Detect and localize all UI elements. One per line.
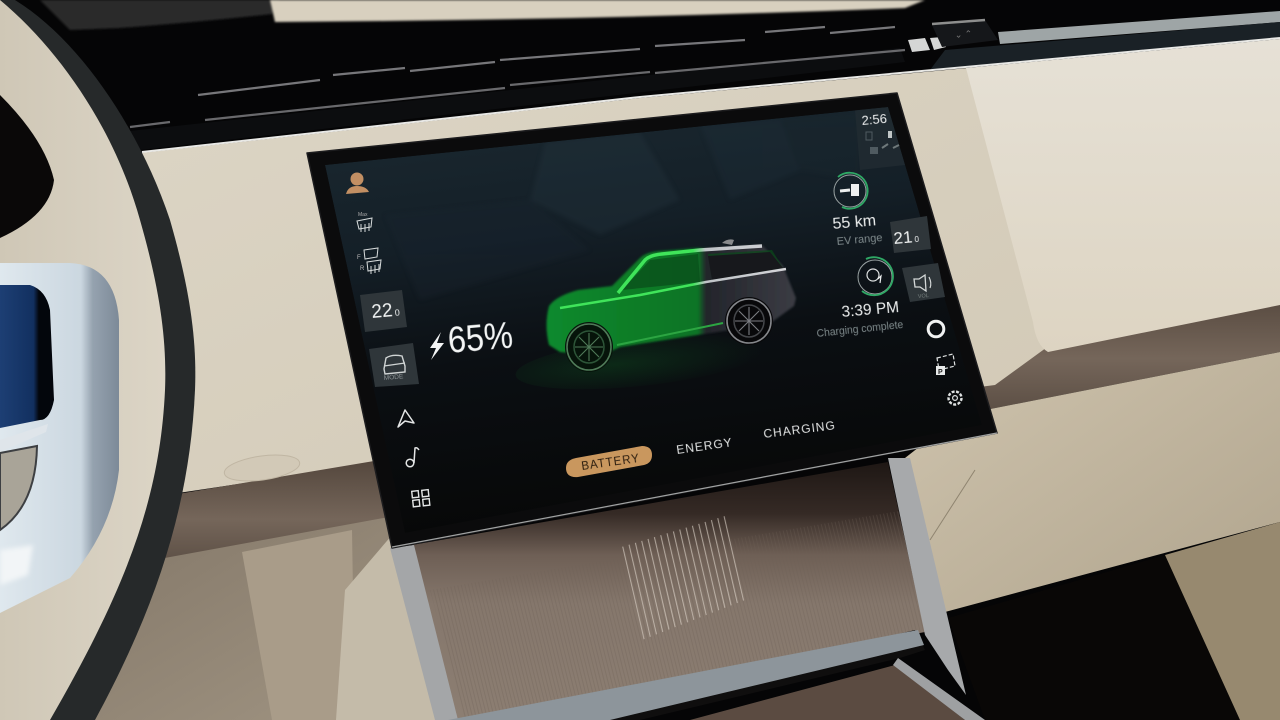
wheel outer dark rim [0, 0, 195, 720]
climate tile: left 22.0 [360, 290, 407, 332]
floor green glow [516, 342, 719, 388]
icon: music note [406, 448, 419, 467]
sill line [617, 323, 723, 345]
range ring [834, 173, 868, 209]
console: wood panel [412, 462, 925, 720]
tab: battery selected [566, 446, 652, 477]
console: right silver rail [888, 458, 966, 695]
silver spoke [0, 263, 119, 613]
car windows [622, 250, 783, 290]
screen: display [325, 107, 934, 389]
wheel cream ring [0, 0, 165, 720]
time value: 3:39 PM [841, 299, 900, 321]
roof fin [722, 239, 734, 245]
tab: charging: CHARGING [763, 418, 836, 441]
climate tile: left 22.0: 220 [371, 300, 400, 323]
range caption: EV range [836, 232, 883, 248]
range value: 55 km [832, 212, 877, 233]
battery charge level: 65% [446, 314, 514, 361]
upper dashboard leather and vents: ⌄ ⌃ [954, 28, 973, 40]
dashboard: central cream panel [140, 68, 1050, 495]
volume tile [902, 263, 945, 302]
climate tile: right 21.0: 210 [893, 227, 920, 248]
dashboard: right cream panel [966, 39, 1280, 352]
lower left panels [60, 451, 440, 720]
roof line [618, 246, 762, 293]
icon: front and rear demist [357, 248, 381, 274]
icon: profile [346, 172, 369, 194]
tab: battery selected: BATTERY [581, 453, 641, 473]
brown trim band right [960, 290, 1280, 415]
wheel inner opening [0, 95, 54, 238]
icon: parking camera: P [938, 369, 943, 376]
console: left silver rail [390, 545, 458, 720]
screen: highlight edge [392, 433, 997, 547]
facets background [385, 112, 860, 300]
belt line [560, 269, 786, 308]
panel crease [930, 470, 975, 540]
icon: rear defrost: Max [358, 212, 368, 218]
icon: assistant ring [928, 321, 944, 337]
console: tray lip [448, 630, 985, 720]
EV range widget [832, 173, 883, 248]
silver dash trim line [142, 38, 1280, 152]
lower right glovebox panel [905, 352, 1280, 612]
charge time widget [816, 257, 904, 340]
car illustration [546, 239, 796, 372]
icon: lightning bolt [430, 332, 444, 360]
clock and status icons: 2:56 [861, 111, 887, 128]
screen: outer bezel [307, 93, 997, 548]
mode tile [369, 343, 419, 387]
icon: rear defrost [357, 212, 372, 232]
rear wheel [725, 297, 773, 345]
icon: settings gear [948, 392, 962, 404]
icon: parking camera [936, 354, 955, 376]
steering wheel [0, 0, 195, 720]
front wheel [565, 322, 613, 372]
right footwell [948, 555, 1240, 720]
icon: apps grid [412, 490, 430, 507]
time ring [858, 257, 893, 295]
time caption: Charging complete [816, 319, 904, 340]
tab: energy: ENERGY [675, 435, 734, 457]
brown trim band left [130, 460, 400, 568]
climate tile: right 21.0 [890, 216, 931, 253]
clock and status icons [861, 111, 899, 154]
right side status strip [855, 107, 905, 170]
wood centre light line texture [618, 516, 745, 640]
lower right floor panel [1165, 522, 1280, 720]
car body [546, 245, 796, 356]
icon: front and rear demist: F [357, 255, 361, 261]
icon: navigation arrow [398, 410, 414, 427]
upper dashboard leather and vents [40, 0, 1280, 150]
icon: front and rear demist: R [360, 266, 365, 272]
volume tile: VOL [918, 293, 929, 300]
mode tile: MODE [384, 373, 404, 382]
